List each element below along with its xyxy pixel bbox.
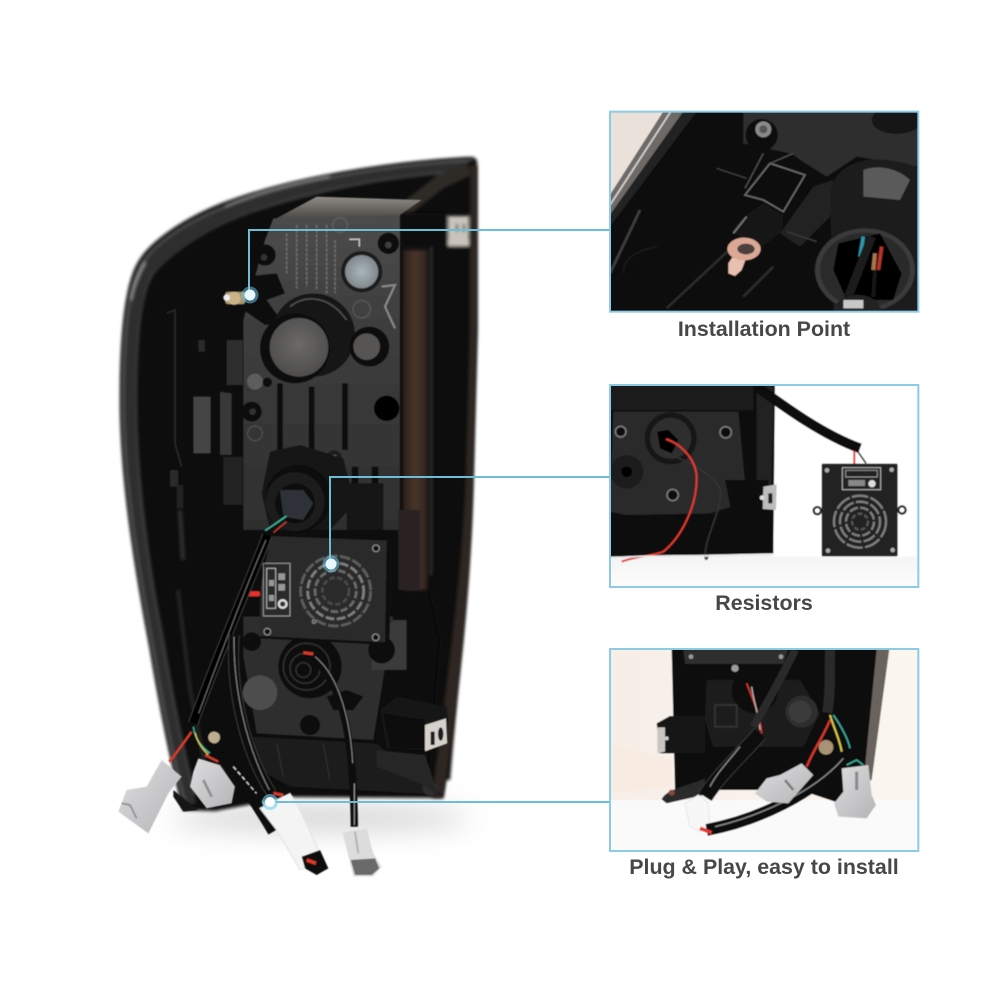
leader line: resistors bbox=[322, 477, 610, 572]
cable to white plug bbox=[223, 758, 273, 832]
white plug bbox=[260, 793, 323, 870]
right grey plug bbox=[343, 828, 382, 877]
resistor wires bbox=[852, 450, 856, 464]
exposed wires bbox=[169, 732, 192, 762]
rectangular relief bbox=[715, 705, 737, 727]
stud bbox=[819, 740, 833, 755]
screws bbox=[615, 426, 731, 501]
bulb socket bbox=[645, 412, 697, 464]
marker dot bbox=[262, 794, 278, 810]
bracket and clip bbox=[725, 480, 768, 508]
right rim bbox=[432, 165, 477, 798]
thick cable to left connector bbox=[193, 535, 267, 723]
back plate with round details bbox=[167, 197, 422, 532]
resistor bottom edge bbox=[683, 649, 788, 664]
long cable bbox=[705, 762, 838, 836]
socket lower bbox=[278, 635, 342, 698]
background cream corner bbox=[610, 112, 663, 195]
grey plate upper bbox=[243, 215, 400, 530]
caption: Plug and Play: Plug & Play, easy to install bbox=[629, 855, 899, 879]
thin black wire bbox=[676, 458, 720, 561]
bulb socket bbox=[262, 445, 355, 530]
panel border bbox=[610, 385, 918, 587]
colored wires bbox=[807, 720, 830, 767]
top right cable bbox=[827, 650, 830, 713]
thin red and grey wire bbox=[747, 683, 762, 733]
red wire bbox=[622, 439, 697, 562]
caption: Resistors: Resistors bbox=[715, 591, 813, 615]
left inner details bbox=[193, 397, 211, 453]
lower housing floor bbox=[253, 737, 443, 795]
resistor front bbox=[822, 464, 898, 556]
resistor and wiring lower half bbox=[118, 510, 448, 877]
cylinder socket bbox=[830, 159, 918, 312]
hole with light inside bbox=[341, 251, 382, 292]
housing rim bbox=[610, 112, 683, 215]
plate bbox=[743, 112, 918, 177]
posts and socket bbox=[706, 680, 709, 681]
cable crossing top bbox=[753, 650, 795, 727]
right lower brown strip bbox=[398, 510, 420, 590]
lower plate bbox=[243, 610, 393, 740]
leader line: plug and play bbox=[262, 794, 610, 810]
table surface bbox=[611, 557, 917, 566]
resistor box bbox=[259, 536, 392, 645]
lamp housing bbox=[120, 157, 477, 811]
upper wires bbox=[267, 516, 287, 532]
panel: installation point bbox=[610, 106, 922, 313]
wires in socket bbox=[860, 237, 863, 257]
secondary hole bbox=[610, 455, 643, 488]
second grey connector bbox=[190, 758, 235, 808]
housing rim highlights bbox=[123, 160, 473, 806]
caption: Installation Point: Installation Point bbox=[678, 317, 850, 341]
tab on table bbox=[662, 778, 705, 803]
resistor fan grille bbox=[301, 556, 371, 626]
panel border bbox=[610, 649, 918, 851]
left grey connector bbox=[118, 760, 182, 833]
screw stud bbox=[225, 292, 245, 304]
black cable from lamp bbox=[757, 387, 860, 448]
housing dark rear bbox=[610, 385, 775, 557]
grommet bbox=[243, 675, 277, 710]
large cap dome bbox=[272, 293, 355, 377]
lower bracket with clip bbox=[380, 697, 448, 750]
right channel and brown strip bbox=[400, 165, 477, 798]
resistor fan grille bbox=[834, 496, 886, 548]
top light panel bbox=[273, 197, 422, 237]
main product: tail light rear view bbox=[118, 157, 477, 877]
housing back bbox=[672, 649, 887, 803]
thick cable to white plug bbox=[705, 733, 760, 797]
panel border bbox=[610, 112, 918, 312]
fins around the stud bbox=[243, 273, 285, 325]
black hole bbox=[374, 396, 399, 421]
rear grommet bbox=[786, 696, 818, 728]
ribs bbox=[280, 383, 345, 452]
marker dot bbox=[322, 556, 340, 572]
screw bbox=[746, 119, 778, 151]
panel: resistors bbox=[610, 385, 918, 587]
stud lower bbox=[210, 723, 250, 753]
smaller cap bbox=[349, 327, 389, 367]
screw posts bbox=[254, 244, 276, 266]
thin cable to right plug bbox=[307, 653, 354, 827]
clip fins bbox=[749, 154, 806, 215]
screw stud bbox=[728, 253, 747, 276]
leader line: installation point bbox=[242, 230, 610, 304]
resistor screws bbox=[264, 545, 379, 641]
resistor label plate bbox=[263, 563, 290, 616]
white plug bbox=[685, 795, 710, 832]
floor shadow bbox=[170, 806, 470, 830]
plate molded text lines bbox=[287, 225, 335, 293]
curved cable bbox=[234, 635, 272, 793]
grey connector right bbox=[834, 765, 876, 818]
grey connector left bbox=[755, 763, 813, 803]
panel: plug and play bbox=[610, 649, 918, 851]
rear hole top right bbox=[872, 112, 918, 134]
upper-left dark box bbox=[243, 593, 267, 617]
inner left vertical lines bbox=[178, 590, 205, 765]
marker dot bbox=[242, 286, 258, 304]
left clip bracket bbox=[657, 716, 705, 753]
